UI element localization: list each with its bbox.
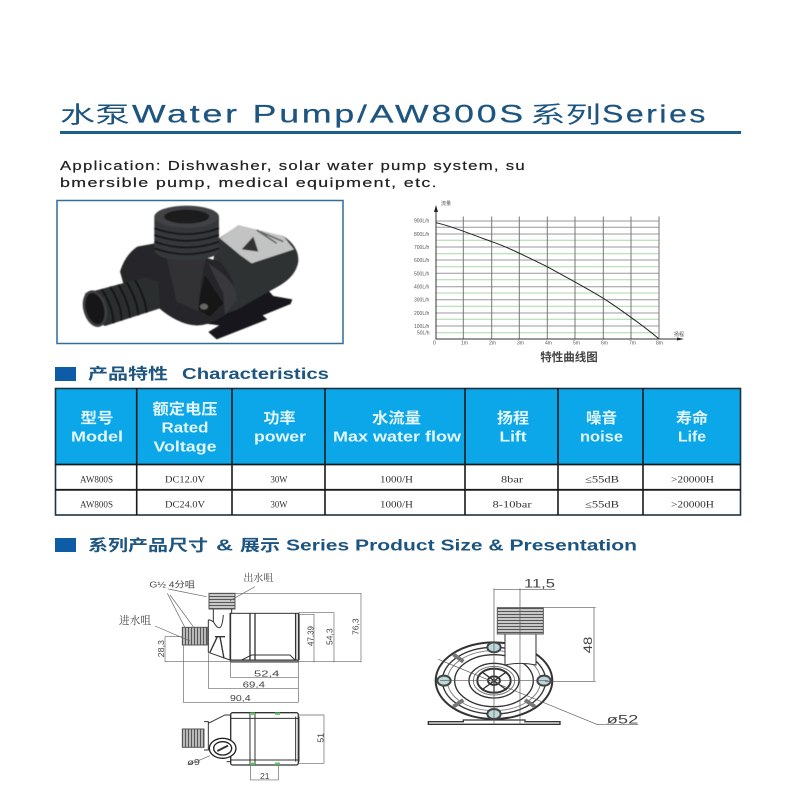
header: life [676,409,708,446]
mounting base [187,289,292,339]
axis labels: 400L/h [414,284,430,290]
header: lift [497,410,529,446]
diagram: front view [428,577,639,727]
axis labels: 4m [545,340,552,346]
performance curve [436,223,659,339]
axis labels [414,200,684,346]
outlet thread [154,217,219,260]
axis labels: 扬程 [674,331,684,338]
row 2: 1000/H [380,500,413,510]
header: noise: 噪音 [586,409,617,427]
axis labels: 1m [461,340,468,346]
heading: characteristics: Characteristics [182,366,329,383]
grid lines [436,216,659,339]
header: rated voltage: Voltage [154,439,216,456]
header: life: 寿命 [676,409,708,427]
row 1: DC12.0V [165,476,205,486]
header: noise [580,409,623,446]
chart caption: 特性曲线图 [540,350,598,364]
dimension text: 进水咀 [119,614,151,627]
dimension text: 出水咀 [243,572,273,585]
motor cylinder [203,227,298,322]
dimension text: 54,3 [324,628,334,645]
axis labels: 900L/h [414,218,430,224]
row 2 [80,500,714,510]
dimension text: ø52 [607,713,639,727]
title underline [60,131,741,134]
row 2: ≤55dB [585,500,619,510]
dimension text: 47,39 [305,626,315,646]
axis labels: 200L/h [414,311,430,317]
title [60,101,708,129]
application text: Application: Dishwasher, solar water pump system, su [60,158,526,173]
header: model [71,410,123,446]
row 1: 1000/H [380,476,413,486]
header: power: 功率 [264,409,296,427]
header: power: power [254,429,306,446]
header: power [254,409,306,446]
axis labels: 700L/h [414,245,430,251]
header: lift: Lift [500,429,526,446]
row 1: ≤55dB [585,476,619,486]
chart: characteristic curve [414,200,684,364]
label [220,225,294,263]
dimension text: 21 [260,771,270,781]
row 1: AW800S [80,476,113,486]
row 2: DC24.0V [165,500,205,510]
header: max water flow: Max water flow [333,429,461,446]
header: rated voltage: 额定电压 [152,400,218,418]
axis labels: 300L/h [414,298,430,304]
axis labels: 100L/h [414,324,430,330]
dimension text: 51 [315,733,325,743]
header: model: Model [71,429,123,446]
header: max water flow: 水流量 [372,409,421,427]
axes [436,208,682,339]
mounting base [428,720,560,724]
row 2: AW800S [80,500,113,510]
table grid [55,388,741,515]
diagram: side and top dimensions [119,572,361,781]
axis labels: 2m [489,340,496,346]
dimension text [524,577,639,727]
row 1: 30W [270,476,288,486]
dimension text: 52,4 [254,668,280,678]
axis labels: 3m [517,340,524,346]
title: Water Pump/AW800S [132,101,526,129]
header: lift: 扬程 [497,410,529,427]
dimension lines [155,587,361,780]
axis labels: 流量 [441,200,451,207]
table: characteristics [55,388,741,515]
heading: characteristics [55,364,329,383]
heading: series product size: 展示 [240,538,280,554]
header: noise: noise [580,429,623,446]
row 1: 8bar [501,476,524,486]
axis labels: 800L/h [414,232,430,238]
side view [182,593,299,662]
dimension text: G½ 4分咀 [149,580,195,590]
heading: series product size: 系列产品尺寸 [88,536,208,554]
axis labels: 5m [573,340,580,346]
header: life: Life [678,429,706,446]
dimension text: ø9 [187,757,200,767]
application text [60,158,526,190]
bolts [437,642,551,719]
dimension text: 28,3 [156,640,166,657]
header: rated voltage [152,400,218,456]
axis labels: 0 [433,340,436,346]
table header background [55,388,740,464]
axis labels: 8m [656,340,663,346]
row 1: >20000H [671,476,714,486]
inlet thread [85,277,160,326]
header: model: 型号 [80,410,114,427]
heading: series product size: & [216,538,233,554]
axis labels: 500L/h [414,272,430,278]
volute housing [120,243,235,325]
row 1 [80,476,714,486]
dimension text: 48 [581,636,595,653]
title: 水泵 [60,102,130,128]
axis labels: 600L/h [414,258,430,264]
outlet neck and thread [497,608,543,665]
row 2: >20000H [671,500,714,510]
application text: bmersible pump, medical equipment, etc. [60,175,438,190]
dimension text: 76,3 [350,618,360,635]
heading: characteristics: 产品特性 [88,364,168,383]
axis labels: 6m [601,340,608,346]
heading: series product size [55,536,637,554]
header: rated voltage: Rated [162,420,208,437]
dimension lines [438,588,638,724]
header: max water flow [333,409,461,446]
dimension text [119,572,360,781]
row 2: 8-10bar [492,500,533,510]
title: 系列 [530,102,601,128]
outlet neck [166,255,207,312]
dimension text: 69,4 [243,679,265,689]
panel: product photo [57,200,343,344]
heading: series product size: Series Product Size & Presentation [286,538,637,554]
title: Series [602,101,708,129]
axis labels: 7m [629,340,636,346]
pump housing [436,642,552,719]
top view [182,713,299,765]
icon: water pump [81,206,298,339]
dimension text: 90,4 [230,693,251,703]
row 2: 30W [270,500,288,510]
dimension text: 11,5 [524,577,555,591]
axis labels: 50L/h [417,330,430,336]
